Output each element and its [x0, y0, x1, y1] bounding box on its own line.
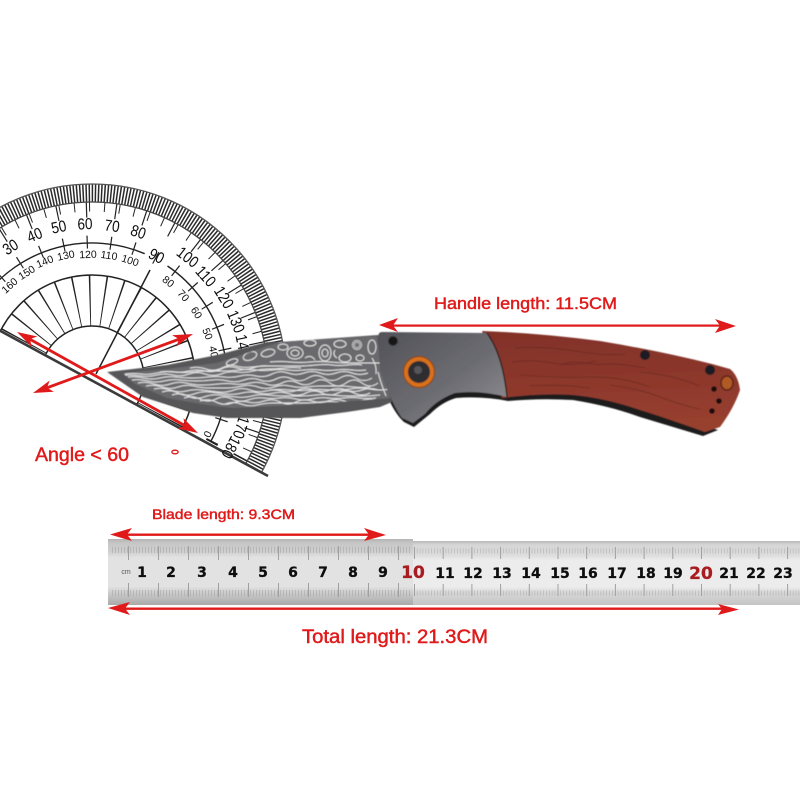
- ruler numbers: 18: [636, 566, 656, 582]
- arrow: total length: [108, 602, 739, 615]
- protractor outer scale numbers: 140: [231, 333, 253, 359]
- protractor inner scale arc: [0, 236, 232, 446]
- ruler numbers: 12: [463, 566, 483, 582]
- ruler numbers: 7: [318, 565, 328, 581]
- bolster screw: [388, 336, 398, 346]
- label: angle: Angle < 60: [35, 445, 129, 466]
- blade bevel: [107, 335, 392, 418]
- protractor inner scale numbers: 60: [188, 305, 204, 321]
- ruler numbers: 23: [773, 566, 793, 582]
- ruler numbers: 14: [521, 566, 541, 582]
- ruler numbers: 13: [492, 566, 512, 582]
- arrow: angle line two: [33, 334, 193, 393]
- protractor inner scale numbers: 70: [175, 288, 191, 304]
- protractor inner scale numbers: 130: [56, 248, 76, 264]
- protractor outer scale numbers: [0, 216, 253, 461]
- protractor inner scale numbers: 110: [100, 249, 118, 263]
- arrow: handle length: [379, 318, 736, 333]
- ruler tick marks: [112, 550, 800, 593]
- ruler numbers: [137, 563, 793, 584]
- ruler numbers: 15: [550, 566, 570, 582]
- protractor outer scale numbers: 30: [0, 237, 22, 259]
- ruler numbers: 11: [435, 566, 455, 582]
- protractor inner scale numbers: 50: [199, 326, 215, 342]
- knife: [107, 331, 740, 436]
- ruler: [108, 539, 800, 605]
- protractor inner scale numbers: 0: [200, 429, 214, 439]
- ruler numbers: 16: [578, 566, 598, 582]
- ruler numbers: 10: [401, 563, 425, 583]
- degree mark: [172, 450, 178, 454]
- ruler left section: [108, 539, 413, 605]
- protractor line work: [0, 183, 284, 472]
- protractor inner scale numbers: 150: [16, 263, 38, 283]
- protractor inner scale numbers: 100: [120, 253, 140, 269]
- ruler numbers: 21: [719, 566, 739, 582]
- arrow: angle line one: [17, 332, 198, 433]
- ruler cm mark: cm: [121, 569, 131, 576]
- ruler numbers: 1: [137, 565, 147, 581]
- ruler numbers: 6: [288, 565, 298, 581]
- protractor inner scale numbers: 140: [35, 253, 56, 271]
- protractor base edge: [0, 328, 268, 476]
- protractor inner scale numbers: 120: [79, 249, 97, 261]
- protractor outer scale numbers: 80: [128, 222, 148, 244]
- ruler numbers: 9: [378, 565, 388, 581]
- label: blade length: Blade length: 9.3CM: [152, 506, 295, 522]
- protractor outer scale numbers: 180: [217, 433, 243, 461]
- protractor outer scale numbers: 120: [210, 284, 236, 312]
- ruler numbers: 17: [607, 566, 627, 582]
- protractor outer scale numbers: 110: [191, 263, 219, 291]
- protractor outer scale numbers: 170: [228, 414, 252, 440]
- protractor outer scale numbers: 100: [173, 244, 201, 272]
- protractor outer scale numbers: 50: [50, 218, 68, 238]
- protractor: [0, 183, 284, 478]
- thumb stud: [351, 339, 363, 351]
- handle pins and lanyard holes: [640, 350, 733, 414]
- damascus pattern: [125, 340, 390, 406]
- protractor radial fan: [0, 270, 194, 428]
- ruler numbers: 4: [228, 565, 238, 581]
- protractor outer scale ticks: [0, 202, 264, 462]
- protractor outer scale numbers: 40: [25, 225, 45, 247]
- ruler numbers: 5: [258, 565, 268, 581]
- label: handle length: Handle length: 11.5CM: [434, 294, 617, 313]
- ruler numbers: 20: [689, 564, 713, 584]
- protractor inner scale numbers: 160: [0, 276, 21, 296]
- ruler numbers: 19: [663, 566, 683, 582]
- blade: [107, 335, 392, 418]
- protractor inner scale numbers: 40: [206, 345, 220, 359]
- protractor outer scale numbers: 90: [145, 246, 167, 268]
- orange pivot: [404, 356, 434, 388]
- ruler numbers: 3: [197, 565, 207, 581]
- protractor outer scale numbers: 70: [103, 217, 121, 237]
- arrow: blade length: [110, 528, 386, 541]
- ruler numbers: 2: [166, 565, 176, 581]
- protractor inner scale numbers: [0, 248, 220, 439]
- steel bolster: [378, 332, 507, 423]
- ruler right section: [413, 541, 800, 605]
- handle black liner: [388, 385, 718, 436]
- protractor outer scale numbers: 60: [77, 216, 93, 234]
- damascus area: [122, 336, 390, 408]
- ruler numbers: 8: [348, 565, 358, 581]
- ruler numbers: 22: [746, 566, 766, 582]
- protractor hatched rim: [0, 183, 284, 472]
- protractor outer scale numbers: 130: [223, 308, 247, 336]
- label: total length: Total length: 21.3CM: [302, 627, 488, 648]
- wood handle scale: [482, 331, 740, 432]
- protractor inner scale numbers: 80: [160, 274, 176, 290]
